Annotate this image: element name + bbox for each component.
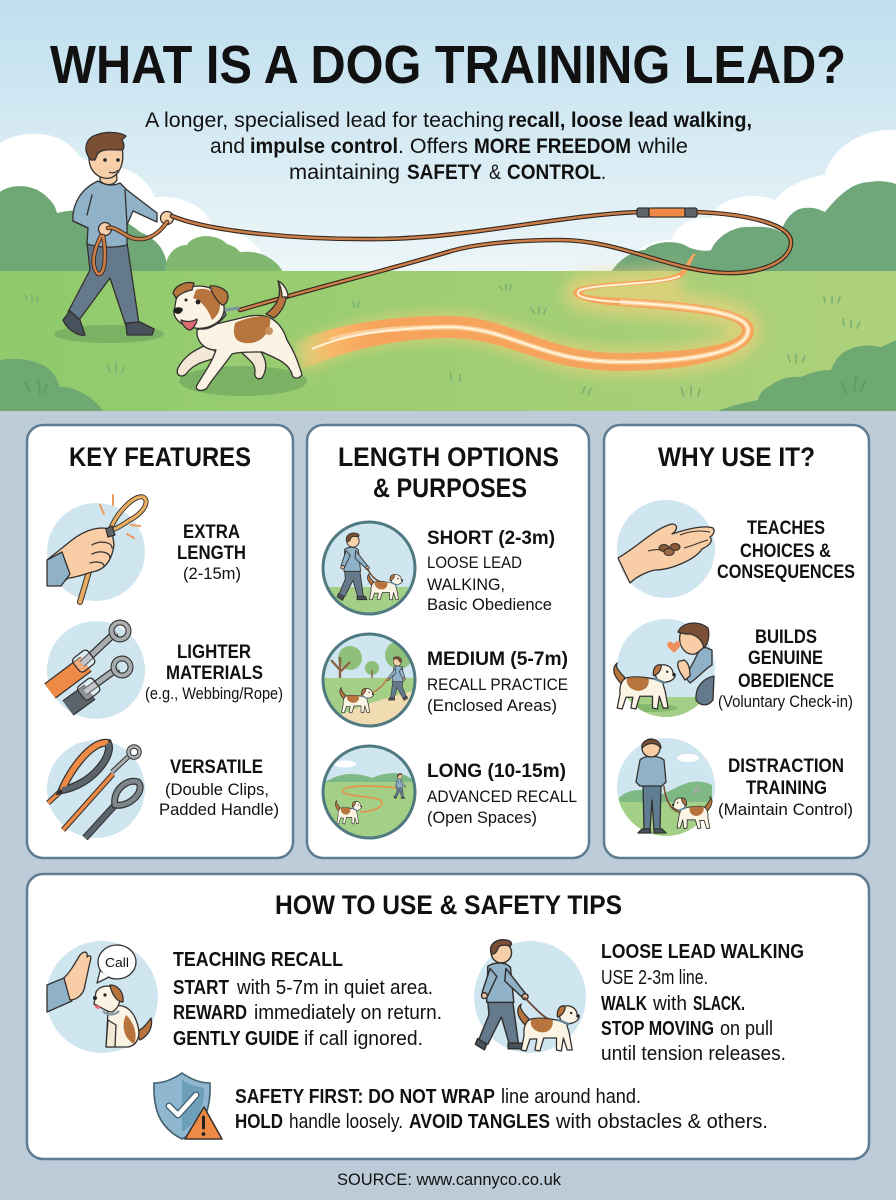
icon: dog running to owner [614, 619, 715, 721]
lead connector clip [637, 208, 697, 217]
panel: why use it [604, 425, 869, 858]
text: short: SHORT (2-3m) [427, 528, 555, 549]
reason: choices and consequences [617, 500, 855, 598]
text: obedience: (Voluntary Check-in) [718, 692, 853, 711]
intro text: & [489, 161, 501, 184]
text: medium: (Enclosed Areas) [427, 696, 557, 715]
text: teaching recall: START [173, 977, 229, 999]
heading: length options: & PURPOSES [373, 473, 527, 503]
icon: lead types [47, 740, 145, 838]
text: extra length [177, 522, 246, 583]
icon: long lead scene [320, 744, 420, 842]
text: medium: MEDIUM (5-7m) [427, 649, 568, 670]
trees right [611, 181, 896, 272]
icon: person walking dog on slack lead [474, 940, 586, 1053]
text: teaching recall: with 5-7m in quiet area. [236, 977, 433, 999]
intro text [145, 109, 752, 184]
text: choices: CHOICES & [740, 541, 831, 562]
text: short: Basic Obedience [427, 595, 552, 614]
text: long [427, 761, 577, 827]
tip: loose lead walking [474, 940, 804, 1065]
text: extra length: EXTRA [183, 522, 240, 543]
text: teaching recall: if call ignored. [304, 1028, 423, 1050]
grass field [0, 271, 896, 411]
intro text: A longer, specialised lead for teaching [145, 109, 504, 132]
icon: hand holding lead [47, 495, 146, 602]
heading: how to use: HOW TO USE & SAFETY TIPS [275, 890, 622, 920]
text: safety first: AVOID TANGLES [409, 1111, 550, 1133]
intro text: and [210, 135, 245, 158]
grass tufts [25, 284, 865, 396]
clouds [0, 130, 896, 272]
text: teaching recall: TEACHING RECALL [173, 949, 343, 971]
text: loose lead walking: SLACK. [693, 993, 745, 1015]
glowing trail on grass [295, 254, 754, 373]
feature: versatile [47, 740, 279, 838]
text: teaching recall: GENTLY GUIDE [173, 1028, 299, 1050]
ground shadows [54, 325, 307, 396]
icon: metal clips and webbing [47, 621, 145, 719]
feature: lighter materials [47, 621, 283, 719]
source line: SOURCE: www.cannyco.co.uk [337, 1170, 561, 1189]
intro text: SAFETY [407, 161, 482, 184]
icon: shield with warning [154, 1073, 222, 1139]
text: loose lead walking: until tension releases. [601, 1043, 786, 1065]
text: safety first: SAFETY FIRST: DO NOT WRAP [235, 1086, 495, 1108]
intro text: MORE FREEDOM [474, 135, 631, 158]
text: obedience [718, 627, 853, 711]
text: long: LONG (10-15m) [427, 761, 566, 782]
panel: key features [27, 425, 293, 858]
trees left [0, 186, 167, 272]
text: lighter materials: (e.g., Webbing/Rope) [145, 684, 283, 703]
text: obedience: BUILDS [755, 627, 817, 648]
text: distraction: (Maintain Control) [718, 800, 853, 819]
text: safety first: with obstacles & others. [555, 1111, 768, 1133]
text: loose lead walking: STOP MOVING [601, 1018, 714, 1040]
icon: short lead scene [320, 520, 420, 617]
text: loose lead walking: USE 2-3m line. [601, 967, 708, 989]
text: safety first: line around hand. [501, 1086, 641, 1108]
text: extra length: LENGTH [177, 543, 246, 564]
intro text: recall, loose lead walking, [508, 109, 752, 132]
text: distraction [718, 756, 853, 819]
icon: recall hand signal and sitting dog: Call [105, 955, 129, 970]
text: distraction: DISTRACTION [728, 756, 844, 777]
intro text: . [601, 161, 606, 184]
feature: extra length [47, 495, 246, 602]
icon: owner and dog with distraction [617, 738, 715, 836]
text: short: LOOSE LEAD [427, 553, 522, 572]
intro text: maintaining [289, 161, 400, 184]
text: lighter materials: LIGHTER [177, 642, 251, 663]
option: short [320, 520, 555, 617]
text: teaching recall: REWARD [173, 1002, 247, 1024]
text: teaching recall: immediately on return. [254, 1002, 442, 1024]
text: short: WALKING, [427, 575, 505, 594]
text: choices: TEACHES [747, 518, 825, 539]
text: versatile: (Double Clips, [165, 780, 269, 799]
text: obedience: OBEDIENCE [738, 671, 834, 692]
hero illustration [0, 0, 896, 411]
heading: key features: KEY FEATURES [69, 442, 251, 472]
intro text: while [637, 135, 688, 158]
intro text: impulse control [250, 135, 398, 158]
text: distraction: TRAINING [746, 778, 827, 799]
text: versatile: Padded Handle) [159, 800, 279, 819]
foreground bushes [0, 340, 896, 411]
text: versatile [159, 757, 279, 819]
panel: length options and purposes [307, 425, 589, 858]
running dog [173, 281, 302, 390]
bushes left [165, 236, 283, 272]
icon: medium lead scene [320, 632, 420, 730]
option: long [320, 744, 577, 842]
lead handle loop [94, 222, 167, 274]
person walking [63, 132, 174, 335]
intro text: CONTROL [507, 161, 601, 184]
text: short [427, 528, 555, 614]
long training lead [172, 212, 791, 310]
text: choices [717, 518, 855, 583]
panel: how to use and safety tips [27, 874, 869, 1159]
text: medium [427, 649, 568, 715]
text: extra length: (2-15m) [183, 564, 241, 583]
text: safety first [235, 1086, 768, 1133]
icon: recall hand signal and sitting dog [46, 941, 158, 1053]
text: loose lead walking: with [652, 993, 687, 1015]
tip: teaching recall [46, 941, 442, 1053]
reason: genuine obedience [614, 619, 853, 721]
text: safety first: handle loosely. [289, 1111, 403, 1133]
text: safety first: HOLD [235, 1111, 283, 1133]
intro text: . Offers [398, 135, 468, 158]
icon: hand with treats [617, 500, 715, 598]
heading: length options [338, 442, 559, 503]
heading: length options: LENGTH OPTIONS [338, 442, 559, 472]
reason: distraction training [617, 738, 853, 836]
option: medium [320, 632, 568, 730]
text: loose lead walking: on pull [720, 1018, 773, 1040]
text: lighter materials [145, 642, 283, 703]
text: medium: RECALL PRACTICE [427, 675, 568, 694]
text: long: ADVANCED RECALL [427, 787, 577, 806]
text: choices: CONSEQUENCES [717, 562, 855, 583]
text: loose lead walking: WALK [601, 993, 647, 1015]
text: teaching recall [173, 949, 442, 1050]
text: lighter materials: MATERIALS [166, 663, 263, 684]
text: long: (Open Spaces) [427, 808, 537, 827]
safety callout [154, 1073, 768, 1139]
text: loose lead walking: LOOSE LEAD WALKING [601, 941, 804, 963]
heading: why use it: WHY USE IT? [658, 442, 815, 472]
text: versatile: VERSATILE [170, 757, 263, 778]
text: obedience: GENUINE [748, 648, 823, 669]
text: loose lead walking [601, 941, 804, 1065]
